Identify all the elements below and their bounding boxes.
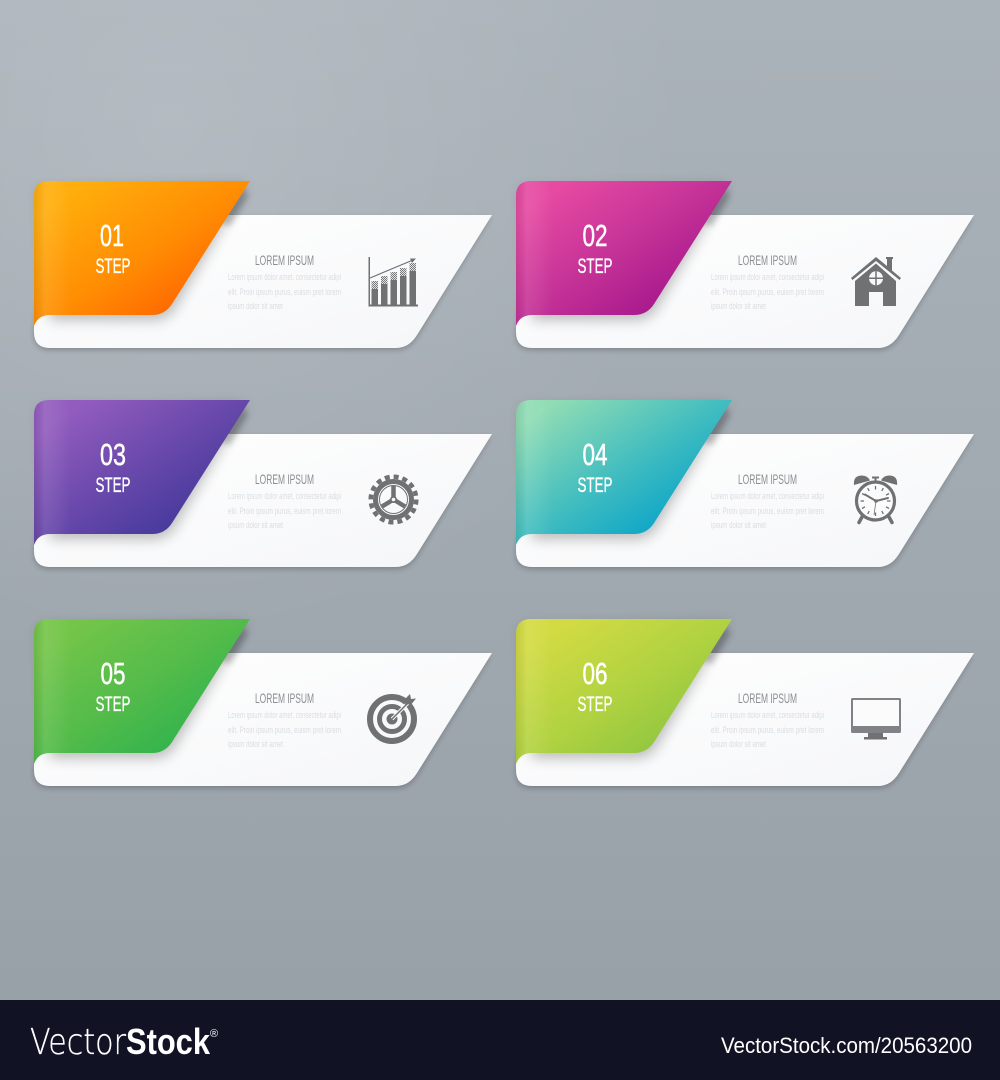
tab: teal — [516, 400, 732, 545]
step number: 01 — [100, 218, 124, 253]
image id: VectorStock.com/20563200 — [721, 1033, 972, 1058]
body text: elit. Proin ipsum purus, euism pret lorem — [228, 287, 341, 298]
body text: elit. Proin ipsum purus, euism pret lorem — [228, 725, 341, 736]
heading: LOREM IPSUM — [255, 252, 314, 268]
icon: target — [370, 694, 416, 741]
card: step 06 — [516, 619, 974, 788]
heading: LOREM IPSUM — [738, 471, 797, 487]
icon: monitor — [851, 698, 901, 740]
panel: white — [34, 434, 492, 567]
step label: STEP — [96, 255, 130, 278]
icon: house — [851, 257, 901, 306]
card: step 01 — [34, 181, 492, 350]
body text: ipsum dolor sit amet — [711, 301, 766, 312]
step number: 06 — [582, 656, 608, 691]
step number: 03 — [100, 437, 126, 472]
panel: white — [516, 215, 974, 348]
card: step 03 — [34, 400, 492, 569]
body text: Lorem ipsum dolor amet, consectetur adipi — [711, 491, 824, 502]
body text: Lorem ipsum dolor amet, consectetur adipi — [228, 491, 341, 502]
body text: Lorem ipsum dolor amet, consectetur adipi — [228, 272, 341, 283]
step number: 02 — [582, 218, 608, 253]
card: step 05 — [34, 619, 492, 788]
heading: LOREM IPSUM — [255, 471, 314, 487]
tab: green — [34, 619, 250, 764]
body text: Lorem ipsum dolor amet, consectetur adipi — [228, 710, 341, 721]
heading: LOREM IPSUM — [255, 690, 314, 706]
body text: ipsum dolor sit amet — [711, 739, 766, 750]
body text: ipsum dolor sit amet — [228, 739, 283, 750]
body text: elit. Proin ipsum purus, euism pret lorem — [711, 725, 824, 736]
step label: STEP — [578, 255, 612, 278]
panel: white — [34, 653, 492, 786]
footer bar — [0, 1000, 1000, 1080]
step label: STEP — [96, 693, 130, 716]
body text: ipsum dolor sit amet — [228, 520, 283, 531]
heading: LOREM IPSUM — [738, 252, 797, 268]
body text — [711, 491, 824, 531]
tab: purple — [34, 400, 250, 545]
body text: Lorem ipsum dolor amet, consectetur adipi — [711, 710, 824, 721]
icon: gear — [371, 477, 416, 522]
tab: lime — [516, 619, 732, 764]
body text: ipsum dolor sit amet — [228, 301, 283, 312]
body text: elit. Proin ipsum purus, euism pret lorem — [228, 506, 341, 517]
card: step 04 — [516, 400, 974, 569]
panel: white — [34, 215, 492, 348]
tab: orange — [34, 181, 250, 326]
body text — [711, 710, 824, 750]
body text: Lorem ipsum dolor amet, consectetur adipi — [711, 272, 824, 283]
step label: STEP — [578, 474, 612, 497]
registered mark: ® — [210, 1028, 218, 1040]
step number: 04 — [582, 437, 608, 472]
panel: white — [516, 653, 974, 786]
step number: 05 — [100, 656, 126, 691]
step label: STEP — [578, 693, 612, 716]
heading: LOREM IPSUM — [738, 690, 797, 706]
body text — [228, 491, 341, 531]
body text — [228, 710, 341, 750]
icon: alarm clock — [854, 476, 897, 522]
step label: STEP — [96, 474, 130, 497]
body text: elit. Proin ipsum purus, euism pret lorem — [711, 287, 824, 298]
body text — [228, 272, 341, 312]
icon: bar chart — [368, 257, 418, 306]
card: step 02 — [516, 181, 974, 350]
body text: ipsum dolor sit amet — [711, 520, 766, 531]
panel: white — [516, 434, 974, 567]
body text: elit. Proin ipsum purus, euism pret lorem — [711, 506, 824, 517]
body text — [711, 272, 824, 312]
logo: VectorStock — [30, 1021, 211, 1063]
tab: pink — [516, 181, 732, 326]
